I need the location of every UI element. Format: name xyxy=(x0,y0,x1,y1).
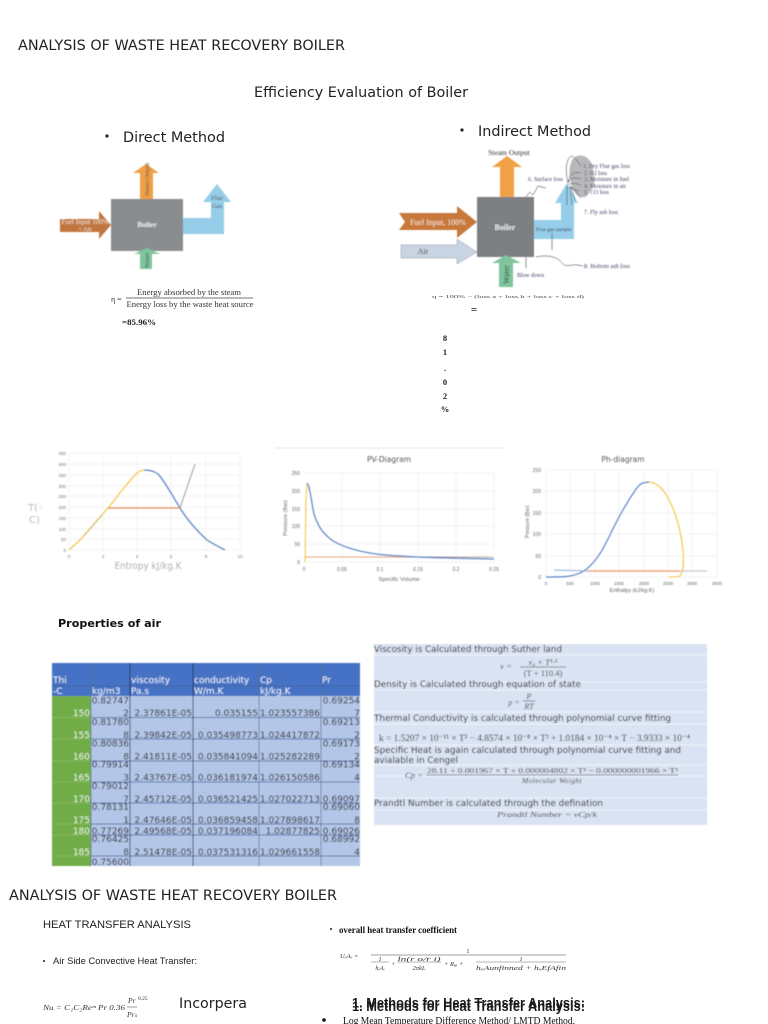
chart: Ph diagram xyxy=(525,455,723,594)
arrow: flue gas: Flue gas sample xyxy=(536,227,572,233)
loss labels: 2. H2 loss xyxy=(584,171,608,177)
chart: Ph diagram: 1500 xyxy=(614,581,625,586)
chart: Ph diagram: 2500 xyxy=(663,581,674,586)
panel: property equations xyxy=(373,644,707,825)
boiler block: Boiler xyxy=(495,223,516,232)
arrow: air xyxy=(401,239,477,264)
density column: 7 xyxy=(123,795,129,805)
temperature column: 185 xyxy=(73,848,90,858)
conductivity column: 0.035498773 xyxy=(198,731,258,741)
result: direct efficiency: =85.96% xyxy=(122,318,156,327)
arrow: fuel input: + Air xyxy=(78,226,93,233)
Cp column: 1.023557386 xyxy=(260,709,320,719)
table header: kJ/kg.K xyxy=(260,687,292,697)
loss labels: Blow down xyxy=(517,273,544,279)
axis label: temperature: C) xyxy=(29,515,40,526)
formula: specific heat: Cp = xyxy=(405,770,423,780)
conductivity column: 0.037196084 xyxy=(198,827,258,837)
arrow: water: Water xyxy=(502,265,511,284)
formula: direct efficiency: Energy loss by the waste heat source xyxy=(126,300,254,309)
chart: T-s diagram: 0 xyxy=(68,554,71,559)
formula: overall coefficient: 1 xyxy=(378,956,382,963)
axis label: temperature: T(◦ xyxy=(27,503,44,514)
conductivity column: 0.036521425 xyxy=(198,795,258,805)
Pr column: 0.69097 xyxy=(323,795,360,805)
axis label: enthalpy: Enthalpy (kJ/kg.K) xyxy=(610,588,654,594)
arrow: flue gas: Gas xyxy=(212,203,223,210)
Pr column: 4 xyxy=(354,774,360,784)
formula: specific heat: Molecular Weight xyxy=(521,776,583,785)
conductivity column: 0.035841094 xyxy=(198,752,258,762)
conductivity column: 0.037531316 xyxy=(198,848,258,858)
chart: T-s diagram: 200 xyxy=(58,505,66,510)
Pr column: 0.69254 xyxy=(323,696,360,706)
formula: viscosity: v = xyxy=(500,661,512,671)
Pr column: 4 xyxy=(354,848,360,858)
chart: T-s diagram: 2 xyxy=(102,554,105,559)
heading: methods for heat transfer analysis: 1. Methods for Heat Transfer Analysis: xyxy=(352,998,585,1014)
Pr column: 2 xyxy=(354,752,360,762)
chart: T-s diagram: 0 xyxy=(63,548,66,553)
viscosity column: 2.43767E-05 xyxy=(134,774,192,784)
axis label: pressure: Pressure (Bar) xyxy=(283,500,289,536)
formula: overall coefficient: hₒAunfinned + hₒEfAfin xyxy=(476,965,566,972)
viscosity column: 2.41811E-05 xyxy=(134,752,192,762)
table header: Cp xyxy=(260,676,272,686)
loss labels xyxy=(517,164,631,279)
formula: viscosity: v₀ × T¹·⁵ xyxy=(528,657,558,667)
heading: heat transfer analysis: HEAT TRANSFER ANALYSIS xyxy=(43,919,191,931)
viscosity column xyxy=(134,709,192,858)
formula: viscosity: (T + 110.4) xyxy=(524,668,562,678)
formula: density: RT xyxy=(523,702,534,711)
chart: Ph diagram: 3500 xyxy=(712,581,723,586)
formula: density: P xyxy=(526,692,532,701)
chart: T-s diagram: 450 xyxy=(58,451,66,456)
table: air properties xyxy=(52,663,360,868)
chart: PV diagram: 0.05 xyxy=(337,567,347,573)
chart: PV diagram: 50 xyxy=(294,542,300,548)
Pr column: 0.69060 xyxy=(323,803,360,813)
loss labels: 1. Dry Flue gas loss xyxy=(583,164,631,170)
formula: direct efficiency xyxy=(111,288,254,309)
boiler block xyxy=(477,197,534,257)
conductivity column: 0.035155 xyxy=(215,709,258,719)
text: specific heat xyxy=(374,746,681,766)
text: specific heat: avialable in Cengel xyxy=(374,756,458,766)
chart: T-s diagram: 350 xyxy=(58,473,66,478)
diagram: indirect method boiler xyxy=(399,148,631,287)
formula: overall coefficient xyxy=(340,948,566,972)
temperature column: 160 xyxy=(73,752,90,762)
formula: Nusselt number: Pr xyxy=(127,996,136,1005)
loss labels: 3. Moisture in fuel xyxy=(584,176,629,183)
result: indirect efficiency: % xyxy=(441,404,449,414)
density column: 0.81780 xyxy=(92,718,129,728)
loss labels: 6. Surface loss xyxy=(528,176,564,183)
Pr column xyxy=(323,696,360,858)
Pr column: 0.69173 xyxy=(323,740,360,750)
chart: T-s diagram: 150 xyxy=(58,516,66,521)
text: density: Density is Calculated through equation of state xyxy=(374,680,581,690)
arrow: steam output: Steam Output xyxy=(145,163,151,196)
chart: PV diagram: 0.2 xyxy=(453,567,460,573)
heading: indirect method: Indirect Method xyxy=(478,124,591,140)
loss labels: 7. Fly ash loss xyxy=(584,210,619,216)
arrow: steam output xyxy=(492,156,522,197)
text: air side convective heat transfer: Air Side Convective Heat Transfer: xyxy=(53,956,197,966)
result: indirect efficiency: 8 xyxy=(443,333,447,343)
viscosity column: 2.39842E-05 xyxy=(134,731,192,741)
Cp column: 1.024417872 xyxy=(260,731,320,741)
table header xyxy=(52,676,331,697)
title: ANALYSIS OF WASTE HEAT RECOVERY BOILER xyxy=(18,38,345,54)
loss lead lines xyxy=(526,156,583,268)
formula: overall coefficient: 2πkL xyxy=(412,965,426,972)
chart: T-s diagram: 8 xyxy=(205,554,208,559)
table header: viscosity xyxy=(131,676,171,686)
chart: T-s diagram: 4 xyxy=(136,554,139,559)
text: thermal conductivity: Thermal Conductivity is calculated through polynomial curve fitting xyxy=(373,714,671,724)
chart: Ph diagram: Ph-diagram xyxy=(601,455,645,464)
density column: 8 xyxy=(123,731,129,741)
Cp column: 1.029661558 xyxy=(260,848,320,858)
arrow: fuel input: Fuel Input, 100% xyxy=(410,218,466,227)
density column: 8 xyxy=(123,848,129,858)
formula: overall coefficient: + Rₑₑ + xyxy=(444,961,463,968)
density column: 0.82747 xyxy=(92,696,129,706)
Pr column: 7 xyxy=(354,709,360,719)
axis label: entropy: Entropy kJ/kg.K xyxy=(114,561,182,572)
chart: Ph diagram: 3000 xyxy=(687,581,698,586)
temperature column: 150 xyxy=(73,709,90,719)
heading: efficiency evaluation: Efficiency Evaluation of Boiler xyxy=(254,85,468,101)
table header: conductivity xyxy=(194,676,250,686)
viscosity column: 2.45712E-05 xyxy=(134,795,192,805)
chart: T-s diagram: 100 xyxy=(58,527,66,532)
chart: T-s diagram xyxy=(27,451,243,572)
result: indirect efficiency: = xyxy=(471,304,477,316)
density column: 0.75600 xyxy=(92,858,129,868)
temperature column: 170 xyxy=(73,795,90,805)
chart: PV diagram: 0.1 xyxy=(377,567,384,573)
table header: Pr xyxy=(322,676,331,686)
chart: Ph diagram: 500 xyxy=(566,581,574,586)
density column: 0.77269 xyxy=(92,827,129,837)
result: indirect efficiency: 1 xyxy=(443,347,447,357)
arrow: fuel input: Fuel Input 100% xyxy=(62,219,109,226)
Pr column: 0.69134 xyxy=(323,760,360,770)
arrow: water xyxy=(134,248,160,269)
diagram: direct method boiler xyxy=(60,163,231,269)
density column: 1 xyxy=(123,816,129,826)
formula: overall coefficient: + xyxy=(391,961,395,968)
formula: direct efficiency: Energy absorbed by the steam xyxy=(137,288,242,297)
arrow: flue gas xyxy=(183,184,231,234)
flue loss cloud xyxy=(569,155,594,197)
Pr column: 2 xyxy=(354,731,360,741)
density column: 0.76425 xyxy=(92,835,129,845)
chart: Ph diagram: 0 xyxy=(538,575,541,581)
loss labels: 4. Moisture in air xyxy=(584,184,626,190)
table header: kg/m3 xyxy=(92,687,120,697)
arrow: water: Water xyxy=(144,252,151,268)
text: Incorpera: Incorpera xyxy=(179,996,247,1012)
density column: 3 xyxy=(123,774,129,784)
chart: PV diagram: 0 xyxy=(297,560,300,566)
formula: Nusselt number: 0.25 xyxy=(138,996,148,1002)
chart: Ph diagram: 150 xyxy=(533,511,541,517)
table header: Pa.s xyxy=(131,687,149,697)
density column: 0.80836 xyxy=(92,740,129,750)
chart: PV diagram: 0.15 xyxy=(413,567,423,573)
result: indirect efficiency: 0 xyxy=(443,377,447,387)
conductivity column xyxy=(198,709,258,858)
text: viscosity: Viscosity is Calculated through Suther land xyxy=(374,645,562,655)
chart: PV diagram: 0 xyxy=(303,567,306,573)
Pr column: 0.68992 xyxy=(323,835,360,845)
table header: W/m.K xyxy=(194,687,225,697)
chart: T-s diagram: 50 xyxy=(61,537,66,542)
title: second section: ANALYSIS OF WASTE HEAT RECOVERY BOILER xyxy=(9,888,337,904)
formula: direct efficiency: η = xyxy=(111,295,122,304)
chart: Ph diagram: 100 xyxy=(533,532,541,538)
arrow: flue gas: Flue xyxy=(211,195,223,202)
heading: properties of air: Properties of air xyxy=(58,617,162,630)
Cp column: 1.027022713 xyxy=(260,795,320,805)
formula: specific heat xyxy=(405,766,679,785)
Pr column: 8 xyxy=(354,816,360,826)
density column: 0.79914 xyxy=(92,760,129,770)
chart: PV diagram: 100 xyxy=(292,524,300,530)
result: indirect efficiency xyxy=(441,304,477,414)
temperature column: 155 xyxy=(73,731,90,741)
formula: Nusselt number: Prₛ xyxy=(126,1010,138,1019)
density column xyxy=(92,696,129,868)
viscosity column: 2.51478E-05 xyxy=(134,848,192,858)
text: specific heat: Specific Heat is again calculated through polynomial curve fitting and xyxy=(374,746,681,756)
conductivity column: 0.036859458 xyxy=(198,816,258,826)
formula: specific heat: 28.11 + 0.001967 × T + 0.000004802 × T² − 0.000000001966 × T³ xyxy=(427,766,679,775)
Pr column: 0.69026 xyxy=(323,827,360,837)
chart: Ph diagram: 1000 xyxy=(590,581,601,586)
chart: PV diagram: 200 xyxy=(292,489,300,495)
density column: 0.79012 xyxy=(92,782,129,792)
loss labels: 8. Bottom ash loss xyxy=(584,264,631,270)
arrow: fuel input xyxy=(399,206,477,238)
formula: density xyxy=(507,692,535,711)
density column: 2 xyxy=(123,709,129,719)
Cp column: 1.027898617 xyxy=(260,816,320,826)
chart: T-s diagram: 250 xyxy=(58,494,66,499)
boiler block: Boiler xyxy=(137,220,157,229)
table header: -C xyxy=(53,687,63,697)
loss labels: 5. CO loss xyxy=(584,190,610,196)
formula: Nusselt number xyxy=(42,996,148,1019)
axis label: temperature xyxy=(27,503,44,526)
Cp column: 1.025282289 xyxy=(260,752,320,762)
formula: prandtl number: Prandtl Number = vCp/k xyxy=(496,811,598,819)
label: steam output: Steam Output xyxy=(488,148,531,157)
temperature column xyxy=(73,709,90,858)
viscosity column: 2.37861E-05 xyxy=(134,709,192,719)
arrow: air: Air xyxy=(418,247,429,256)
chart: Ph diagram: 2000 xyxy=(639,581,650,586)
chart: PV diagram: PV-Diagram xyxy=(367,455,411,464)
arrow: steam output xyxy=(133,163,159,199)
viscosity column: 2.47646E-05 xyxy=(134,816,192,826)
density column: 8 xyxy=(123,752,129,762)
boiler block xyxy=(111,199,183,251)
chart: T-s diagram: 400 xyxy=(58,462,66,467)
formula: indirect efficiency: η = 100% − (loss a + loss b + loss c + loss d) xyxy=(432,294,585,299)
formula: thermal conductivity: k = 1.5207 × 10⁻¹¹ × T³ − 4.8574 × 10⁻⁸ × T² + 1.0184 × 10⁻⁴ × T − 3.9333 × 10⁻⁴ xyxy=(379,734,691,744)
heading: methods for heat transfer analysis: 1. Methods for Heat Transfer Analysis: xyxy=(352,994,585,1010)
axis label: pressure: Pressure (Bar) xyxy=(525,505,531,538)
result: indirect efficiency: 2 xyxy=(443,391,447,401)
Cp column: 1.02877825 xyxy=(266,827,320,837)
Pr column: 0.69213 xyxy=(323,718,360,728)
arrow: flue gas xyxy=(534,183,578,239)
chart: PV diagram: 0.25 xyxy=(489,567,499,573)
formula: overall coefficient: 1 xyxy=(466,948,470,955)
chart: Ph diagram: 50 xyxy=(535,554,541,560)
temperature column: 175 xyxy=(73,816,90,826)
chart: PV diagram xyxy=(275,448,506,583)
formula: overall coefficient: 1 xyxy=(519,956,523,963)
Cp column: 1.026150586 xyxy=(260,774,320,784)
chart: T-s diagram: 300 xyxy=(58,484,66,489)
text: overall heat transfer coefficient: overall heat transfer coefficient xyxy=(339,926,458,936)
text: prandtl number: Prandtl Number is calculated through the defination xyxy=(374,799,603,809)
chart: Ph diagram: 0 xyxy=(545,581,548,586)
formula: overall coefficient: hᵢAᵢ xyxy=(375,965,385,972)
viscosity column: 2.49568E-05 xyxy=(134,827,192,837)
formula: overall coefficient: UₒAₒ = xyxy=(340,953,358,960)
arrow: water xyxy=(492,255,521,287)
Cp column xyxy=(260,709,320,858)
heading: direct method: Direct Method xyxy=(123,130,225,146)
chart: T-s diagram: 6 xyxy=(170,554,173,559)
formula: overall coefficient: ln(r o/r i) xyxy=(398,956,440,963)
formula: viscosity xyxy=(500,657,566,678)
chart: PV diagram: 250 xyxy=(292,471,300,477)
chart: Ph diagram: 200 xyxy=(533,489,541,495)
density column: 0.78131 xyxy=(92,803,129,813)
conductivity column: 0.036181974 xyxy=(198,774,258,784)
chart: T-s diagram: 10 xyxy=(237,554,243,559)
temperature column: 165 xyxy=(73,774,90,784)
temperature column: 180 xyxy=(73,827,90,837)
arrow: fuel input xyxy=(60,211,111,239)
axis label: specific volume: Specific Volume xyxy=(378,577,420,583)
table header: Thi xyxy=(52,676,67,686)
chart: Ph diagram: 250 xyxy=(533,468,541,474)
chart: PV diagram: 150 xyxy=(292,507,300,513)
formula: density: ρ = xyxy=(507,698,520,707)
formula: Nusselt number: Nu = C₁C₂Reᵐ Pr 0.36 xyxy=(42,1003,125,1012)
result: indirect efficiency: . xyxy=(444,363,446,373)
